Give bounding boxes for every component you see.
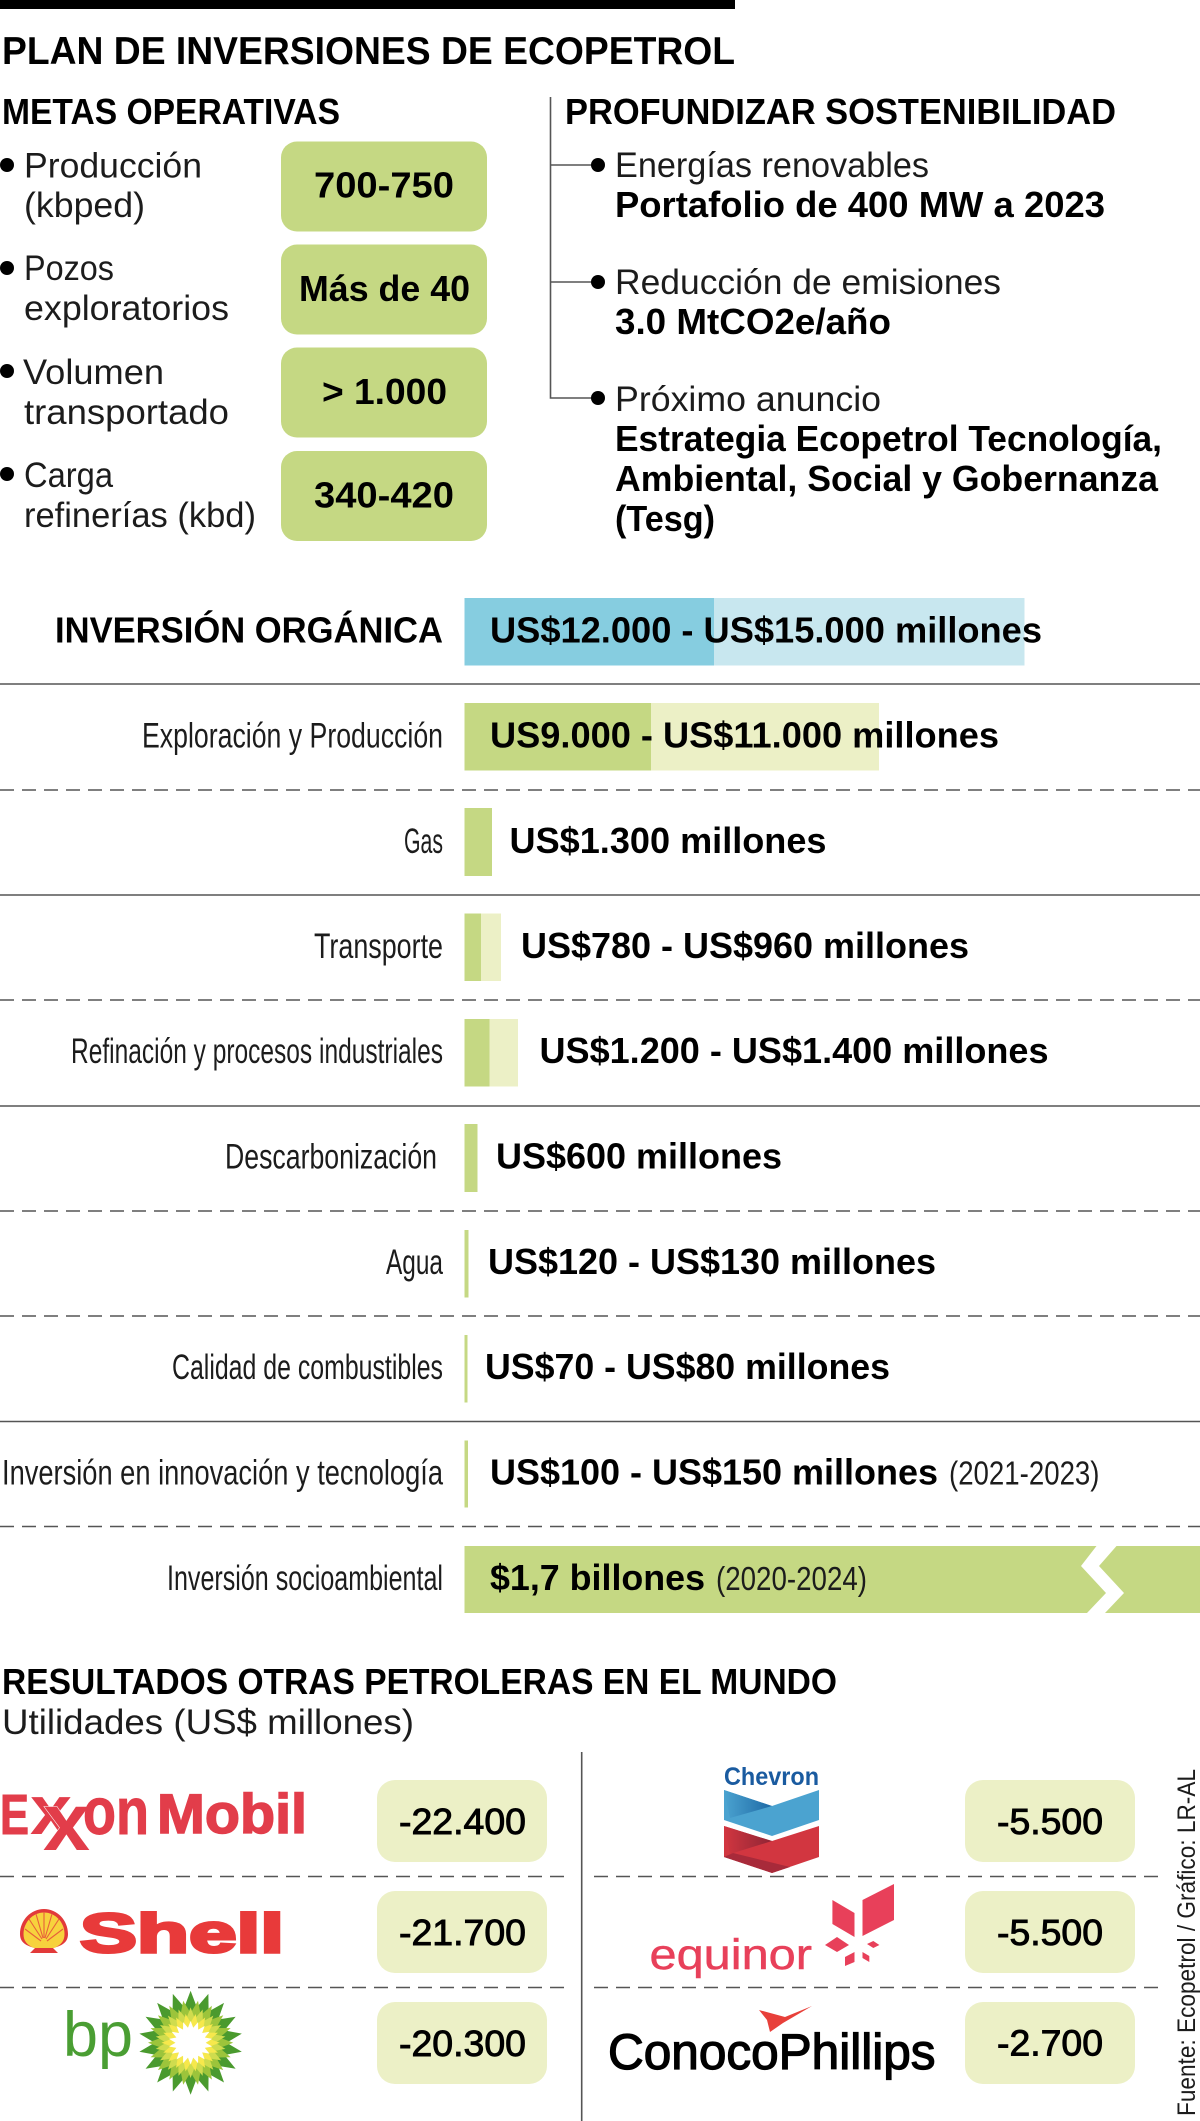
item: volumen transportado: Volumen <box>23 353 164 392</box>
bar chart: inversión <box>0 598 1200 1613</box>
value: shell <box>377 1891 547 1973</box>
row: inversión socioambiental: (2020-2024) <box>716 1560 867 1597</box>
row: refinación y procesos industriales: US$1.200 - US$1.400 millones <box>540 1030 1048 1071</box>
row: exploración y producción <box>142 703 999 770</box>
heading: metas operativas: METAS OPERATIVAS <box>2 91 340 132</box>
item: reducción de emisiones <box>591 263 1001 342</box>
item: carga refinerías: refinerías (kbd) <box>24 496 256 535</box>
row: gas: Gas <box>404 822 443 861</box>
value: exxonmobil: -22.400 <box>399 1801 526 1842</box>
row: agua: US$120 - US$130 millones <box>488 1241 936 1282</box>
row: refinación y procesos industriales <box>71 1019 1048 1086</box>
company table separators <box>0 1752 1161 2121</box>
value: chevron <box>965 1780 1135 1862</box>
heading: resultados otras petroleras: RESULTADOS OTRAS PETROLERAS EN EL MUNDO <box>2 1661 837 1702</box>
row: inversión en innovación y tecnología: US$100 - US$150 millones <box>490 1452 938 1492</box>
row: exploración y producción: US9.000 - US$11.000 millones <box>490 714 999 756</box>
value: conocophillips <box>965 2002 1135 2084</box>
logo: exxonmobil <box>0 1771 307 1868</box>
row: transporte <box>314 914 969 981</box>
icon: bp helios <box>139 1991 242 2095</box>
logo: chevron <box>724 1763 819 1873</box>
row: calidad de combustibles <box>172 1335 890 1402</box>
row: descarbonización: US$600 millones <box>496 1136 782 1176</box>
item: producción: (kbped) <box>24 186 145 225</box>
logo: exxonmobil: x <box>43 1777 90 1868</box>
item: carga refinerías: 340-420 <box>314 474 454 516</box>
value: bp: -20.300 <box>399 2023 526 2064</box>
logo: exxonmobil: on <box>83 1774 149 1848</box>
value: conocophillips: -2.700 <box>997 2022 1103 2064</box>
subheading: utilidades: Utilidades (US$ millones) <box>2 1703 414 1742</box>
logo: exxonmobil: Mobil <box>157 1782 307 1845</box>
value: chevron: -5.500 <box>997 1801 1103 1842</box>
item: energías renovables: Energías renovables <box>615 146 929 185</box>
item: pozos exploratorios: Más de 40 <box>299 268 470 309</box>
item: producción: 700-750 <box>314 164 454 206</box>
item: volumen transportado <box>0 348 487 438</box>
logo: exxonmobil: x <box>30 1771 72 1849</box>
row: inversión orgánica <box>55 598 1042 666</box>
row: inversión en innovación y tecnología: Inversión en innovación y tecnología <box>2 1454 443 1492</box>
row: agua: Agua <box>386 1243 443 1282</box>
row: inversión en innovación y tecnología: (2021-2023) <box>949 1454 1100 1492</box>
value: exxonmobil <box>377 1780 547 1862</box>
item: producción: Producción <box>24 146 202 186</box>
item: pozos exploratorios <box>0 244 487 334</box>
icon: shell pecten <box>20 1909 68 1953</box>
row: agua <box>386 1230 936 1298</box>
item: pozos exploratorios: exploratorios <box>24 289 229 328</box>
value: equinor: -5.500 <box>997 1912 1103 1953</box>
row: descarbonización: Descarbonización <box>225 1138 437 1176</box>
row: transporte: US$780 - US$960 millones <box>521 925 969 966</box>
row: refinación y procesos industriales: Refinación y procesos industriales <box>71 1032 443 1071</box>
item: próximo anuncio: (Tesg) <box>615 498 715 539</box>
top bar <box>0 0 735 9</box>
logo: shell <box>20 1902 284 1964</box>
row: calidad de combustibles: US$70 - US$80 millones <box>485 1346 890 1387</box>
panel: profundizar sostenibilidad <box>550 91 1162 539</box>
item: carga refinerías: Carga <box>24 456 113 495</box>
row: inversión socioambiental: $1,7 billones <box>490 1557 705 1598</box>
row separators <box>0 684 1200 1526</box>
item: reducción de emisiones: 3.0 MtCO2e/año <box>615 301 891 342</box>
logo: shell: Shell <box>80 1902 284 1964</box>
icon: equinor star <box>825 1884 894 1966</box>
item: pozos exploratorios: Pozos <box>24 249 114 288</box>
logo: conocophillips: ConocoPhillips <box>608 2024 936 2080</box>
logo: equinor: equinor <box>650 1931 812 1979</box>
row: inversión orgánica: US$12.000 - US$15.000 millones <box>490 610 1042 650</box>
item: energías renovables: Portafolio de 400 MW a 2023 <box>615 184 1105 225</box>
row: inversión orgánica: INVERSIÓN ORGÁNICA <box>55 608 443 650</box>
item: volumen transportado: > 1.000 <box>322 371 447 412</box>
row: transporte: Transporte <box>314 927 443 966</box>
value: shell: -21.700 <box>399 1912 526 1953</box>
value: bp <box>377 2002 547 2084</box>
item: producción <box>0 142 487 232</box>
item: reducción de emisiones: Reducción de emisiones <box>615 263 1001 302</box>
row: inversión socioambiental: Inversión socioambiental <box>167 1559 443 1598</box>
item: energías renovables <box>591 146 1105 225</box>
item: próximo anuncio: Estrategia Ecopetrol Tecnología, <box>615 418 1162 459</box>
panel: metas operativas <box>0 91 487 541</box>
item: próximo anuncio <box>591 380 1162 539</box>
row: gas: US$1.300 millones <box>510 820 826 861</box>
item: próximo anuncio: Próximo anuncio <box>615 380 881 419</box>
row: exploración y producción: Exploración y Producción <box>142 716 443 756</box>
row: inversión socioambiental <box>167 1546 1200 1613</box>
row: calidad de combustibles: Calidad de combustibles <box>172 1348 443 1387</box>
logo: chevron: Chevron <box>724 1763 819 1791</box>
item: próximo anuncio: Ambiental, Social y Gobernanza <box>615 458 1159 499</box>
logo: bp <box>63 1991 242 2095</box>
value: equinor <box>965 1891 1135 1973</box>
title: PLAN DE INVERSIONES DE ECOPETROL <box>2 30 735 73</box>
row: inversión en innovación y tecnología <box>2 1440 1100 1508</box>
row: descarbonización <box>225 1124 782 1192</box>
connector lines <box>550 97 598 398</box>
logo: equinor <box>650 1884 894 1979</box>
logo: exxonmobil: E <box>0 1783 29 1847</box>
heading: profundizar sostenibilidad: PROFUNDIZAR SOSTENIBILIDAD <box>565 91 1116 132</box>
row: gas <box>404 808 826 876</box>
icon: chevron emblem <box>724 1790 819 1873</box>
item: carga refinerías <box>0 451 487 541</box>
logo: bp: bp <box>63 2000 133 2070</box>
item: volumen transportado: transportado <box>24 393 229 432</box>
